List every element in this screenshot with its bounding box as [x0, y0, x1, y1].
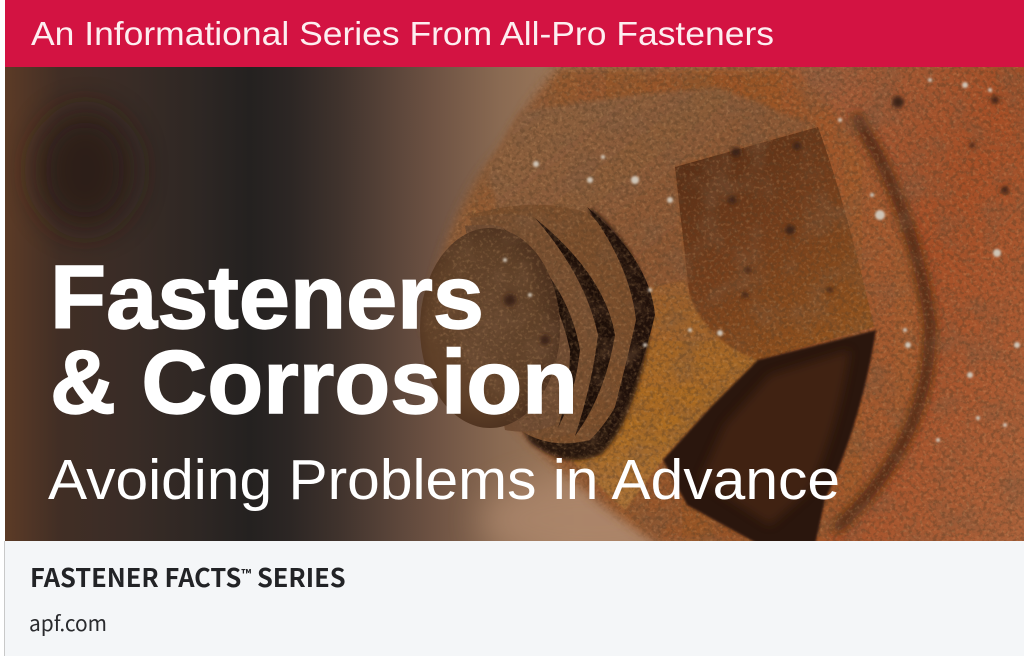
banner text: An Informational Series From All-Pro Fasteners	[31, 16, 774, 53]
series heading: FASTENER FACTS	[30, 559, 241, 595]
nut right face	[675, 127, 874, 360]
main title	[50, 248, 578, 433]
bolt end	[420, 228, 560, 428]
subtitle: Avoiding Problems in Advance	[48, 448, 840, 512]
footer panel	[5, 541, 1024, 656]
photo: rusty bolt	[5, 67, 1024, 565]
rust specks	[503, 78, 1020, 442]
main title: Fasteners	[50, 248, 484, 348]
washer	[425, 67, 933, 545]
first thread	[465, 225, 522, 432]
left margin edge	[4, 541, 6, 656]
header banner	[5, 0, 1024, 67]
nut lower left face	[560, 280, 758, 510]
nut top face	[494, 87, 812, 286]
photo background	[5, 67, 780, 541]
series heading: ™	[241, 564, 251, 583]
third thread	[470, 205, 640, 443]
series heading: SERIES	[251, 559, 346, 595]
third groove	[587, 207, 655, 445]
soft pale foreground at bottom	[474, 477, 652, 541]
rusted plate	[780, 67, 1024, 541]
rust texture	[390, 67, 1024, 541]
blurred dark shape at left	[35, 110, 135, 230]
website: apf.com	[29, 608, 107, 638]
thread shadow	[520, 207, 650, 460]
dark pits	[504, 96, 1009, 345]
bolt thread	[420, 205, 655, 460]
main title: & Corrosion	[50, 333, 578, 433]
second groove	[535, 218, 615, 436]
first groove	[503, 228, 580, 428]
hex nut	[488, 87, 874, 510]
nut shadow	[663, 330, 876, 545]
second thread	[470, 218, 472, 225]
